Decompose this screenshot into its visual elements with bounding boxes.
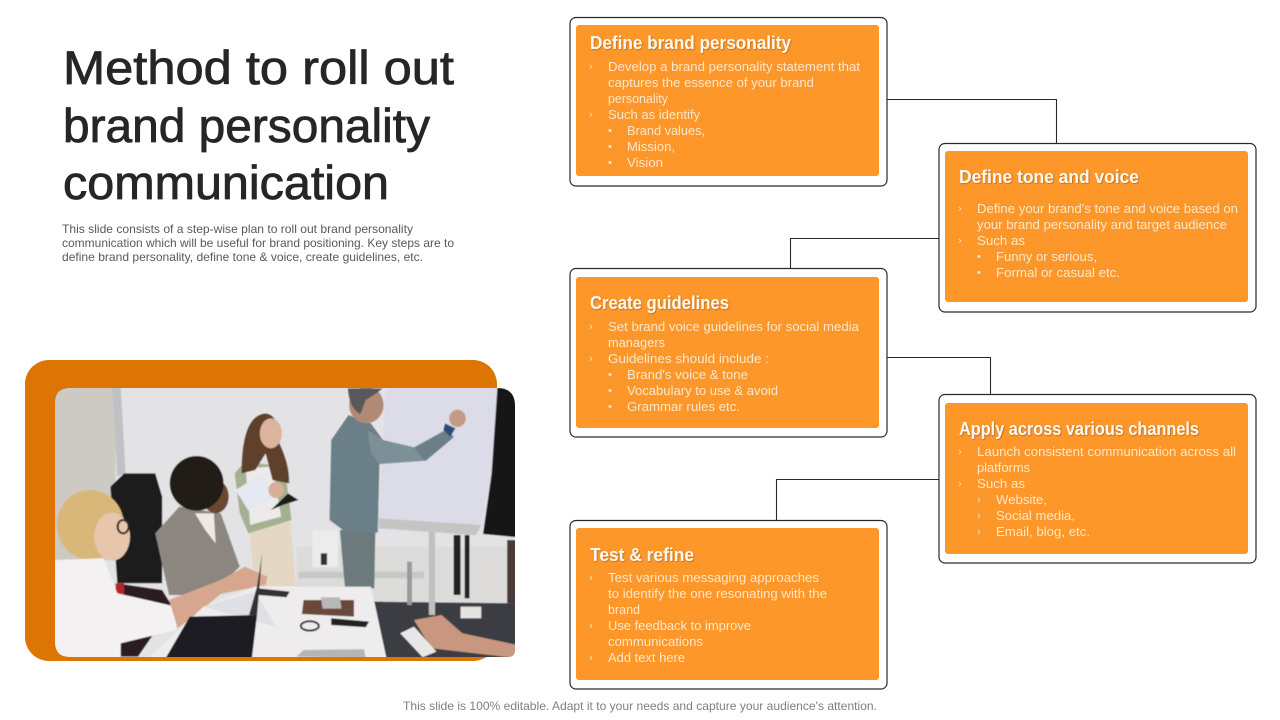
description text: This slide consists of a step-wise plan to roll out brand personality [62,222,413,236]
title: communication [63,156,389,209]
panel: apply across various channels [939,394,1256,563]
list: define brand personality: › [589,109,593,121]
list: create guidelines: Brand's voice & tone [627,367,748,382]
list: define brand personality: Develop a brand personality statement that [608,59,860,74]
list: create guidelines: • [608,385,612,397]
list: apply across various channels: Such as [977,476,1025,491]
list: define brand personality: • [608,125,612,137]
list: create guidelines: Vocabulary to use & avoid [627,383,778,398]
list: define brand personality: Such as identify [608,107,700,122]
photo: team meeting at a flipchart [52,387,518,658]
list: create guidelines: › [589,321,593,333]
list: test and refine: to identify the one resonating with the [608,586,827,601]
heading: define brand personality: Define brand personality [590,33,791,53]
list: create guidelines: managers [608,335,665,350]
description text: define brand personality, define tone & voice, create guidelines, etc. [62,250,423,264]
panel: test and refine [570,520,887,689]
description text: communication which will be useful for brand positioning. Key steps are to [62,236,454,250]
list: define brand personality: › [589,61,593,73]
list: define tone and voice: › [958,203,962,215]
panel: define tone and voice [939,144,1256,312]
title [63,41,454,209]
connector: channels to test [776,480,939,520]
title: brand personality [63,99,431,152]
list: apply across various channels: › [977,494,981,506]
list: define brand personality: • [608,157,612,169]
list: define tone and voice: • [977,267,981,279]
list: test and refine: communications [608,634,703,649]
orange photo backing shape [25,360,497,661]
list: create guidelines: Guidelines should include : [608,351,769,366]
heading: define tone and voice: Define tone and voice [959,167,1139,187]
list: create guidelines [589,319,860,414]
list: test and refine: Test various messaging approaches [608,570,820,585]
heading: create guidelines: Create guidelines [590,293,729,313]
list: apply across various channels: › [977,526,981,538]
list: apply across various channels: Email, blog, etc. [996,524,1090,539]
panel: create guidelines [570,268,887,437]
list: apply across various channels: platforms [977,460,1030,475]
connector: guidelines to channels [887,358,990,394]
list: apply across various channels: Website, [996,492,1047,507]
list: define tone and voice: your brand personality and target audience [977,217,1227,232]
list: define tone and voice: • [977,251,981,263]
connector: tone to guidelines [790,238,939,268]
list: test and refine: Add text here [608,650,685,665]
list: apply across various channels [958,444,1236,539]
list: define brand personality: personality [608,91,668,106]
list: define brand personality: Mission, [627,139,675,154]
list: define brand personality: Brand values, [627,123,705,138]
list: test and refine [589,570,827,665]
list: define tone and voice: Define your brand's tone and voice based on [977,201,1238,216]
list: apply across various channels: Social media, [996,508,1075,523]
list: create guidelines: › [589,353,593,365]
list: define brand personality: Vision [627,155,663,170]
list: create guidelines: Grammar rules etc. [627,399,740,414]
list: define tone and voice: Such as [977,233,1025,248]
list: define tone and voice: › [958,235,962,247]
list: define tone and voice [958,201,1238,280]
list: create guidelines: Set brand voice guidelines for social media [608,319,860,334]
list: define brand personality: • [608,141,612,153]
heading: test and refine: Test & refine [590,545,694,565]
list: create guidelines: • [608,401,612,413]
list: test and refine: › [589,572,593,584]
description text [62,222,454,264]
list: apply across various channels: › [958,478,962,490]
list: apply across various channels: › [977,510,981,522]
list: define brand personality: captures the essence of your brand [608,75,814,90]
list: create guidelines: • [608,369,612,381]
list: apply across various channels: › [958,446,962,458]
list: test and refine: brand [608,602,640,617]
panel: define brand personality [570,18,887,186]
list: test and refine: Use feedback to improve [608,618,751,633]
connector: personality to tone [887,100,1056,143]
list: apply across various channels: Launch consistent communication across all [977,444,1236,459]
list: define tone and voice: Formal or casual etc. [996,265,1120,280]
list: define tone and voice: Funny or serious, [996,249,1097,264]
list: test and refine: › [589,652,593,664]
list: test and refine: › [589,620,593,632]
title: Method to roll out [63,41,454,94]
list: define brand personality [589,59,860,170]
heading: apply across various channels: Apply across various channels [959,419,1199,439]
footer note: This slide is 100% editable. Adapt it to your needs and capture your audience's attention. [403,699,877,713]
